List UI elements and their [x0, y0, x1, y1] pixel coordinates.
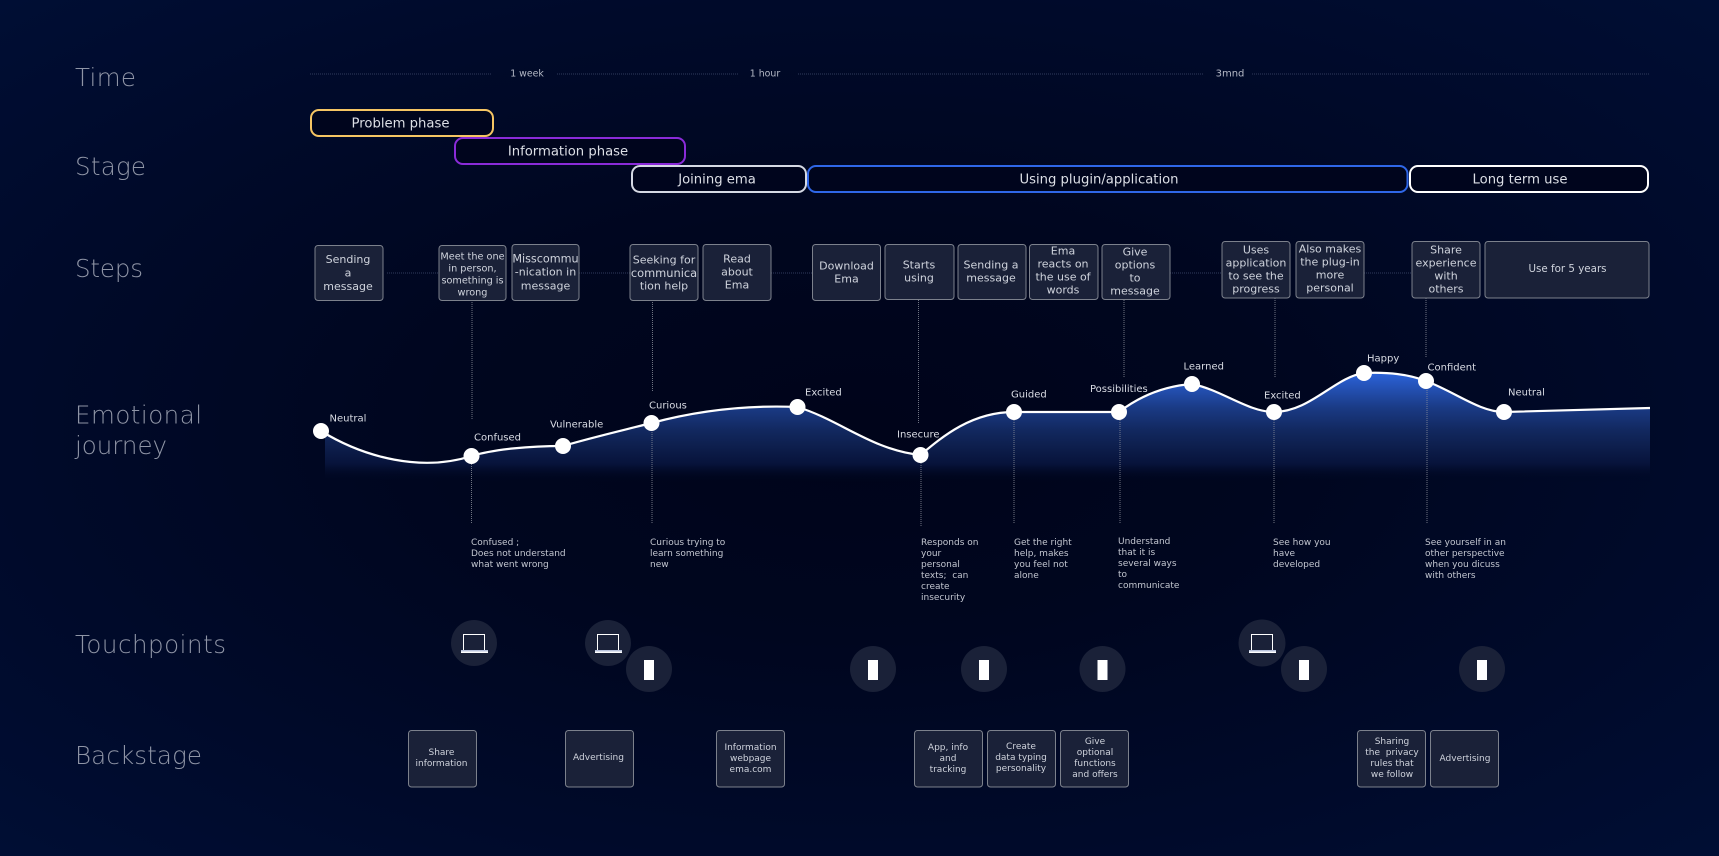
backstage: App, info and tracking: and [940, 754, 956, 764]
backstage: Create data typing personality: Create [1006, 742, 1036, 752]
description: Confused: what went wrong [471, 560, 549, 570]
description: Guided [1014, 538, 1072, 581]
backstage: App, info and tracking [914, 730, 982, 787]
step: Uses application to see the progress: to see the [1228, 270, 1284, 282]
step: Starts using: using [904, 272, 934, 284]
row label: Emotional journey: journey [74, 431, 167, 460]
step: Also makes the plug-in more personal: Also makes [1299, 242, 1361, 256]
emotional journey chart [313, 354, 1650, 526]
timeline: 1 week [510, 68, 544, 80]
data points [313, 365, 1512, 464]
step: Misscommunication in message [512, 244, 579, 300]
backstage: App, info and tracking: tracking [930, 765, 966, 775]
backstage: Create data typing personality: personality [996, 764, 1047, 774]
description: Guided: you feel not [1014, 560, 1068, 570]
row label: Time: Time [75, 63, 136, 92]
backstage: Give optional functions and offers: Give [1085, 737, 1106, 747]
backstage: Create data typing personality: data typing [995, 753, 1047, 763]
drop lines [472, 390, 1427, 526]
stage: Information phase [455, 138, 685, 164]
area under curve [325, 374, 1650, 474]
description: Possibilities: that it is [1118, 548, 1156, 558]
description: Confident [1425, 538, 1506, 581]
emotion labels: Neutral [330, 414, 366, 424]
stage: Information phase: Information phase [508, 144, 628, 160]
description: Insecure: your [921, 549, 942, 559]
description: Possibilities: Understand [1118, 537, 1170, 547]
stage: Using plugin/application [808, 166, 1408, 192]
backstage: Create data typing personality [988, 730, 1056, 787]
connector lines [387, 273, 1426, 423]
description: Insecure: insecurity [921, 593, 966, 603]
step: Share experience with others: experience [1416, 256, 1477, 270]
step: Use for 5 years [1485, 242, 1649, 298]
description: Confused: Confused ; [471, 538, 519, 548]
step: Starts using: Starts [903, 258, 936, 272]
description: Confident: other perspective [1425, 549, 1505, 559]
backstage: Information webpage: ema.com [730, 765, 771, 775]
step: Read about Ema: Ema [725, 278, 749, 292]
icon: laptop [585, 620, 631, 666]
emotion labels: Learned [1184, 362, 1224, 372]
step: Sending a message: Sending a [964, 258, 1018, 272]
icon: phone [626, 646, 672, 692]
step: Download Ema [812, 244, 880, 300]
backstage: Sharing the privacy rules: Sharing [1375, 737, 1409, 747]
row label: Emotional journey: Emotional [75, 400, 202, 430]
backstage: Share information: information [416, 759, 467, 769]
stage: Long term use [1410, 166, 1648, 192]
step: Also makes the plug-in more personal [1296, 242, 1364, 298]
description: Guided: Get the right [1014, 538, 1072, 548]
emotion labels: Neutral [1508, 388, 1545, 398]
step: Ema reacts on the use of words [1030, 244, 1098, 300]
step: Use for 5 years: Use for 5 years [1528, 263, 1607, 275]
step: Uses application to see the progress: application [1226, 256, 1286, 270]
description: Confused [471, 538, 566, 570]
backstage: Sharing the privacy rules: the privacy [1365, 748, 1419, 758]
step: Sending a message: a [345, 266, 351, 280]
description: Possibilities: to [1118, 570, 1128, 580]
backstage: Advertising: Advertising [573, 753, 624, 763]
backstage: Give optional functions and offers: optional [1077, 748, 1113, 758]
row label: Emotional journey [74, 400, 202, 460]
backstage: Sharing the privacy rules [1358, 730, 1426, 787]
step: Sending a message [315, 246, 383, 300]
step: Also makes the plug-in more personal: more [1316, 268, 1344, 282]
description: Excited: have [1273, 549, 1296, 559]
backstage: Give optional functions and offers: and offers [1072, 770, 1118, 780]
step: Seeking for communication help: Seeking for [633, 254, 696, 266]
step: Read about Ema: about [721, 266, 754, 278]
steps row [315, 242, 1649, 300]
step: Seeking for communication help: tion help [640, 280, 688, 292]
step: Give options to message: options [1115, 258, 1156, 272]
step: Also makes the plug-in more personal: personal [1306, 282, 1354, 294]
step: Seeking for communication help [630, 244, 698, 300]
backstage: Information webpage: webpage [730, 754, 772, 764]
step: Sending a message [958, 244, 1026, 300]
step: Download Ema: Ema [834, 272, 859, 286]
step: Misscommunication in message: Misscommu [512, 252, 579, 266]
description: Insecure: Responds on [921, 538, 978, 548]
step: Share experience with others: others [1428, 282, 1464, 296]
step: Sending a message: message [323, 280, 373, 293]
backstage: Advertising [566, 730, 634, 787]
description: Excited [1273, 538, 1331, 570]
icon: phone [961, 646, 1007, 692]
description: Confident: when you dicuss [1425, 560, 1500, 570]
emotion labels [330, 354, 1545, 444]
stage: Joining ema [632, 166, 806, 192]
description: Curious [650, 538, 726, 570]
backstage: Give optional functions and offers [1060, 730, 1128, 787]
step: Ema reacts on the use of words: reacts on [1037, 258, 1089, 270]
description: Confused: Does not understand [471, 549, 566, 559]
stage: Long term use: Long term use [1473, 172, 1567, 188]
emotion labels: Excited [805, 388, 842, 398]
backstage: Share information: Share [429, 748, 455, 758]
step: Misscommunication in message: message [521, 280, 570, 292]
icon: phone [1080, 646, 1126, 692]
step: Misscommunication in message: -nication in [515, 266, 576, 278]
curve line [321, 373, 1650, 463]
step: Seeking for communication help: communica [631, 266, 697, 280]
step: Starts using [885, 244, 954, 300]
emotion labels: Insecure [897, 430, 940, 440]
emotion labels: Confident [1428, 362, 1476, 374]
description: Insecure: texts; can [921, 571, 968, 581]
step: Share experience with others [1412, 242, 1480, 298]
description: Curious: learn something [650, 549, 723, 559]
description: Possibilities: several ways [1118, 559, 1177, 569]
description: Excited: See how you [1273, 538, 1331, 548]
description: Curious: Curious trying to [650, 538, 726, 548]
description: Confident: See yourself in an [1425, 538, 1506, 548]
description: Excited: developed [1273, 560, 1320, 570]
emotion labels: Curious [649, 400, 687, 412]
backstage: Information webpage: Information [724, 743, 777, 753]
stage: Problem phase [311, 110, 493, 136]
icon: laptop [1238, 620, 1286, 666]
row label: Touchpoints: Touchpoints [75, 630, 226, 659]
description: Possibilities: communicate [1118, 581, 1180, 591]
step: Give options to message: Give [1123, 246, 1148, 258]
backstage: Sharing the privacy rules: rules that [1370, 759, 1414, 769]
backstage: Information webpage [716, 730, 784, 787]
description: Curious: new [650, 560, 669, 570]
backstage: Give optional functions and offers: functions [1074, 759, 1116, 769]
description: Possibilities [1118, 537, 1180, 591]
step: Read about Ema: Read [723, 252, 751, 266]
step: Read about Ema [703, 244, 771, 300]
emotion labels: Happy [1367, 354, 1399, 364]
step: Sending a message: message [966, 272, 1016, 284]
icon: phone [1281, 646, 1327, 692]
step: Give options to message: message [1110, 284, 1160, 298]
row label: Backstage: Backstage [75, 741, 202, 770]
emotion labels: Confused [474, 432, 521, 444]
backstage row [408, 730, 1498, 787]
step: Uses application to see the progress: progress [1232, 282, 1280, 296]
step: Share experience with others: with [1434, 270, 1458, 282]
backstage: Advertising [1430, 730, 1498, 787]
backstage: Sharing the privacy rules: we follow [1371, 770, 1413, 780]
timeline: 3mnd [1216, 68, 1244, 80]
emotion labels: Vulnerable [550, 420, 603, 430]
step: Also makes the plug-in more personal: the plug-in [1300, 256, 1360, 268]
step: Meet the one in person: wrong [458, 288, 487, 298]
step: Download Ema: Download [819, 260, 874, 272]
icon: phone [1459, 646, 1505, 692]
step: Ema reacts on the use of words: the use of [1035, 270, 1092, 284]
icon: laptop [451, 620, 497, 666]
step: Give options to message: to [1129, 272, 1141, 284]
touchpoints row [451, 620, 1505, 692]
description: Confident: with others [1425, 571, 1476, 581]
stage: Joining ema: Joining ema [677, 172, 756, 188]
step: Meet the one in person: in person, [448, 264, 497, 274]
step: Share experience with others: Share [1430, 244, 1462, 256]
backstage: Share information [408, 730, 476, 787]
step: Uses application to see the progress [1222, 242, 1290, 298]
icon: phone [850, 646, 896, 692]
backstage: Advertising: Advertising [1440, 754, 1490, 764]
emotion labels: Possibilities [1090, 384, 1148, 395]
step: Meet the one in person: Meet the one [440, 252, 505, 262]
step: Meet the one in person [439, 246, 506, 300]
description: Insecure: create [921, 582, 950, 592]
backstage: App, info and tracking: App, info [928, 743, 969, 753]
emotion labels: Guided [1011, 390, 1047, 400]
step: Give options to message [1102, 244, 1170, 300]
description: Guided: alone [1014, 571, 1039, 581]
row label: Stage: Stage [75, 152, 146, 181]
timeline: 1 hour [750, 68, 780, 80]
step: Sending a message: Sending [326, 253, 370, 266]
step: Meet the one in person: something is [441, 276, 504, 286]
description: Insecure [921, 538, 978, 603]
row label: Steps: Steps [75, 254, 143, 283]
timeline [310, 68, 1650, 80]
emotion labels: Excited [1264, 390, 1301, 402]
stage: Using plugin/application: Using plugin/application [1019, 172, 1179, 188]
stage: Problem phase: Problem phase [352, 116, 449, 132]
description: Insecure: personal [921, 560, 960, 570]
step: Ema reacts on the use of words: words [1047, 284, 1080, 296]
description: Guided: help, makes [1014, 549, 1069, 559]
step: Ema reacts on the use of words: Ema [1051, 244, 1075, 258]
step: Uses application to see the progress: Uses [1243, 244, 1269, 256]
